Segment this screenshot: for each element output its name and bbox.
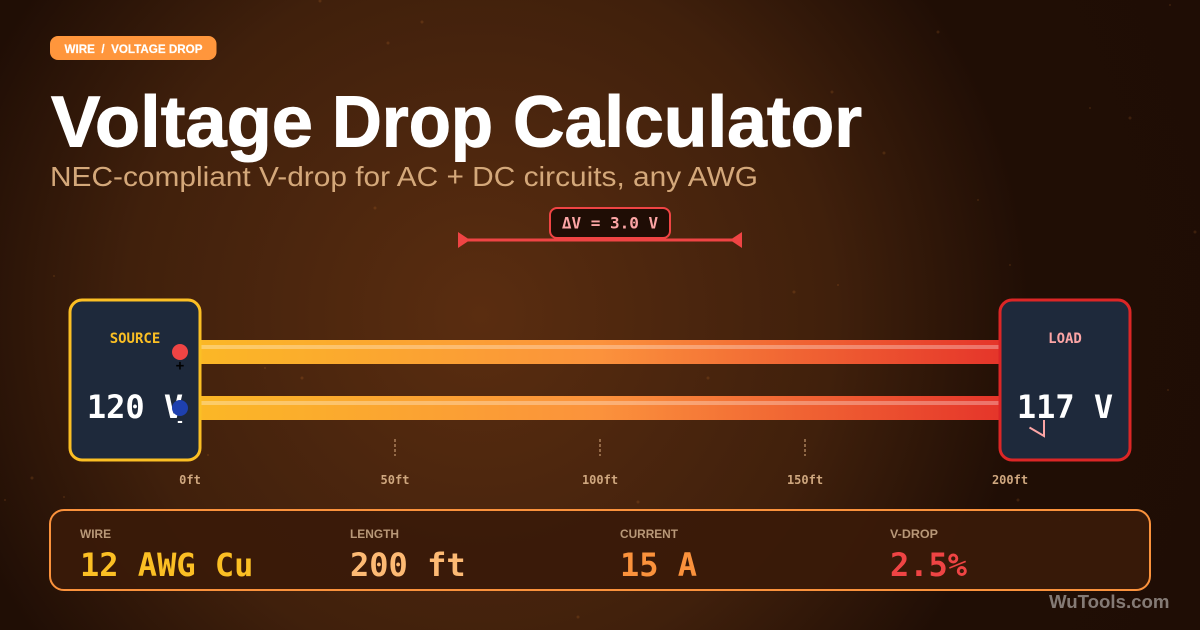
- distance scale: 200ft: [992, 473, 1028, 487]
- source voltage: 120 V: [87, 388, 183, 426]
- panel: load: [1000, 300, 1130, 460]
- distance scale: 0ft: [179, 473, 201, 487]
- icon: positive terminal: [172, 344, 188, 374]
- title: [51, 82, 862, 162]
- arrow: span of voltage drop: [458, 232, 742, 248]
- title: Drop: [332, 82, 493, 162]
- panel: source: [70, 300, 200, 460]
- delta V label: ΔV = 3.0 V: [562, 214, 659, 232]
- distance scale: 150ft: [787, 473, 823, 487]
- icon: negative terminal: [172, 400, 188, 430]
- distance scale: 100ft: [582, 473, 618, 487]
- distance scale: 50ft: [381, 473, 409, 487]
- category badge: [50, 36, 216, 60]
- stat: current: CURRENT: [620, 527, 679, 541]
- icon: positive terminal: +: [176, 358, 184, 374]
- stat: wire: 12 AWG Cu: [80, 546, 253, 584]
- load label: LOAD: [1048, 331, 1082, 347]
- stat: current: [620, 527, 697, 584]
- top wire: [200, 340, 1000, 364]
- stat: voltage drop: [890, 527, 968, 584]
- stat: voltage drop: 2.5%: [890, 546, 968, 584]
- bottom wire: [200, 396, 1000, 420]
- stat: voltage drop: V-DROP: [890, 527, 938, 541]
- stat: length: [350, 527, 466, 584]
- stat: wire: [80, 527, 253, 584]
- icon: load glyph: [1030, 420, 1044, 436]
- stat: length: 200 ft: [350, 546, 466, 584]
- title: Voltage: [51, 82, 313, 162]
- stat: wire: WIRE: [80, 527, 111, 541]
- load voltage: 117 V: [1017, 388, 1113, 426]
- subtitle: NEC-compliant V-drop for AC + DC circuits, any AWG: [50, 161, 758, 192]
- voltage drop indicator: [458, 208, 742, 248]
- title: Calculator: [513, 82, 862, 162]
- distance scale: [179, 439, 1028, 487]
- stat: current: 15 A: [620, 546, 697, 584]
- panel: stats: [50, 510, 1150, 590]
- watermark: WuTools.com: [1049, 592, 1170, 612]
- stat: length: LENGTH: [350, 527, 399, 541]
- delta V label: [550, 208, 670, 238]
- category badge: WIRE / VOLTAGE DROP: [64, 42, 202, 56]
- source label: SOURCE: [110, 331, 160, 347]
- icon: negative terminal: -: [176, 414, 184, 430]
